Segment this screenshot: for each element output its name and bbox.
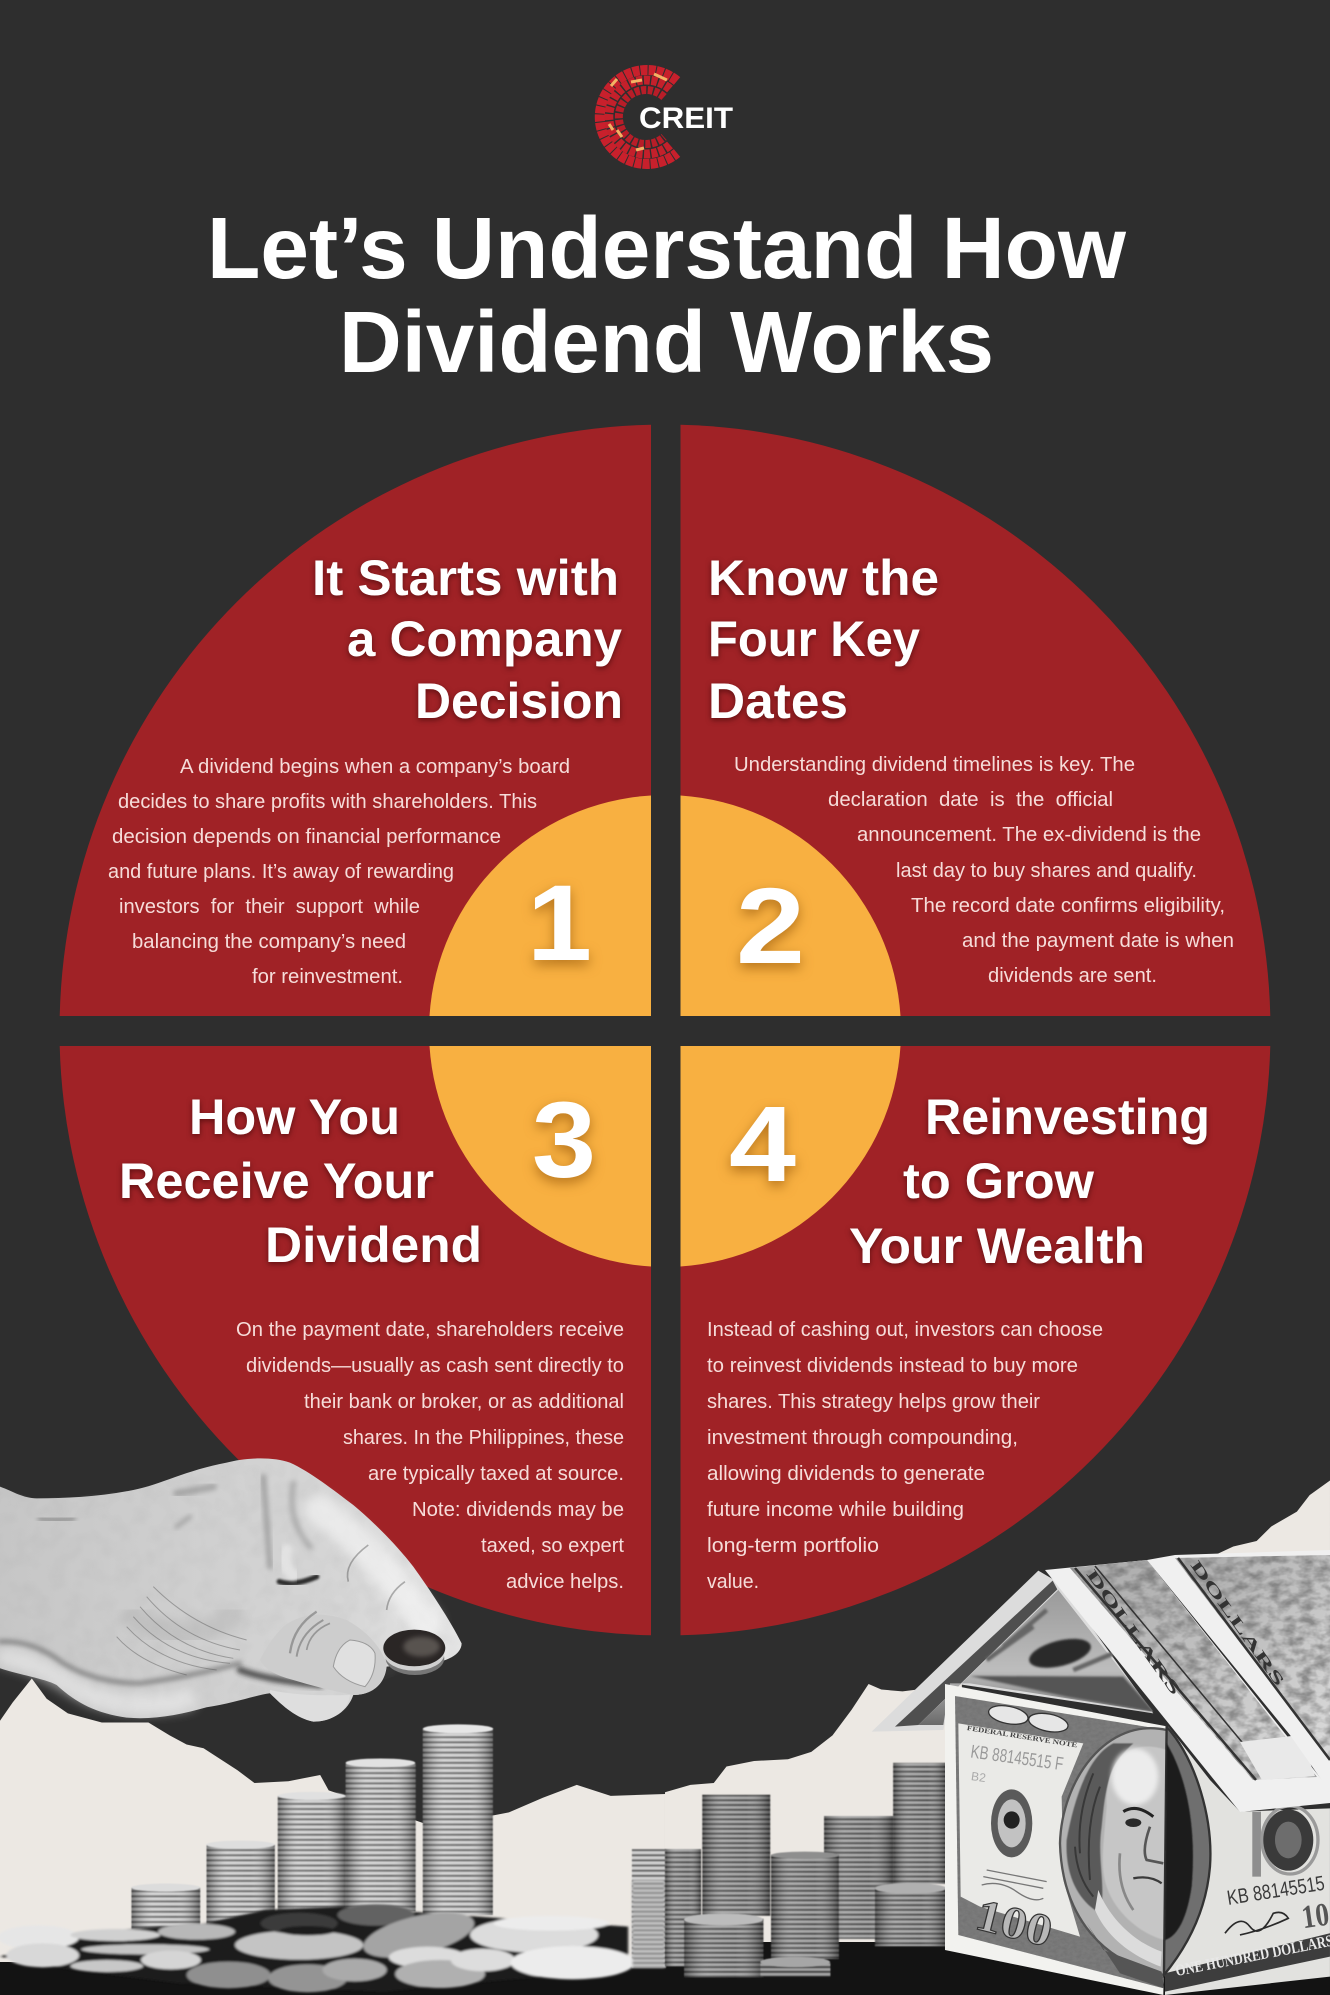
body text: Note: dividends may be bbox=[412, 1498, 624, 1521]
portrait oval bbox=[1060, 1728, 1167, 1975]
heading bbox=[708, 550, 939, 729]
roof: right bill: DOLLARS bbox=[1187, 1558, 1287, 1689]
body text: dividends—usually as cash sent directly to bbox=[246, 1354, 624, 1377]
right wall bbox=[1165, 1727, 1330, 1995]
heading bbox=[849, 1089, 1210, 1274]
body text: are typically taxed at source. bbox=[368, 1462, 624, 1485]
roof: left bill bbox=[1045, 1555, 1330, 1812]
heading: Your Wealth bbox=[849, 1218, 1145, 1274]
body text: investment through compounding, bbox=[707, 1426, 1018, 1449]
body text: value. bbox=[707, 1570, 759, 1593]
roof: left bill: DOLLARS bbox=[1083, 1567, 1183, 1698]
heading: It Starts with bbox=[312, 550, 619, 606]
body text: On the payment date, shareholders receive bbox=[236, 1318, 624, 1341]
torn paper background bbox=[0, 1481, 1330, 1992]
heading: Know the bbox=[708, 550, 939, 606]
body text: taxed, so expert bbox=[481, 1534, 624, 1557]
panel: step 3 bbox=[60, 1046, 651, 1635]
panel: step 2 bbox=[680, 425, 1270, 1016]
image: hand holding coin bbox=[0, 1457, 463, 1723]
number 2: 2 bbox=[736, 865, 805, 986]
body text: announcement. The ex-dividend is the bbox=[857, 823, 1201, 846]
heading: How You bbox=[189, 1089, 400, 1145]
image: coin stacks right bbox=[665, 1763, 946, 1977]
body text bbox=[108, 755, 570, 988]
panel: step 4 bbox=[680, 1046, 1270, 1635]
heading: Receive Your bbox=[119, 1153, 434, 1209]
body text bbox=[236, 1318, 624, 1593]
body text: shares. This strategy helps grow their bbox=[707, 1390, 1040, 1413]
body text: to reinvest dividends instead to buy more bbox=[707, 1354, 1078, 1377]
body text: shares. In the Philippines, these bbox=[343, 1426, 624, 1449]
title: Dividend Works bbox=[339, 294, 994, 391]
number circle quarter bbox=[680, 796, 900, 1016]
front wall bill: KB 88145515 F bbox=[969, 1741, 1065, 1775]
body text: declaration date is the official bbox=[828, 788, 1113, 811]
body text: allowing dividends to generate bbox=[707, 1462, 985, 1485]
top 100 ornaments bbox=[987, 1703, 1070, 1735]
body text: The record date confirms eligibility, bbox=[911, 894, 1225, 917]
front wall bill bbox=[945, 1684, 1210, 1995]
quadrant red bbox=[680, 425, 1270, 1016]
body text: Understanding dividend timelines is key. The bbox=[734, 753, 1135, 776]
black ground band bbox=[0, 1942, 1330, 1995]
heading: Dates bbox=[708, 673, 848, 729]
number circle quarter bbox=[680, 1046, 900, 1266]
roof: right bill bbox=[1147, 1550, 1330, 1792]
number circle quarter bbox=[430, 796, 651, 1016]
body text bbox=[707, 1318, 1103, 1593]
logo wordmark: CREIT bbox=[639, 102, 733, 135]
body text: future income while building bbox=[707, 1498, 964, 1521]
hand shading bbox=[0, 1477, 427, 1704]
body text: Instead of cashing out, investors can choose bbox=[707, 1318, 1103, 1341]
lower fingers bbox=[270, 1690, 350, 1722]
gable and interior bbox=[872, 1571, 1153, 1732]
hand grain texture bbox=[0, 1457, 463, 1723]
title: Let’s Understand How bbox=[207, 200, 1126, 297]
bottom 100: 100 bbox=[971, 1890, 1057, 1957]
heading: Four Key bbox=[708, 611, 920, 667]
right wall emblem bbox=[1252, 1812, 1261, 1877]
body text: decides to share profits with shareholders. This bbox=[118, 790, 537, 813]
signature bbox=[982, 1870, 1047, 1900]
image: scattered coins pile bbox=[0, 1880, 664, 1992]
heading: Reinvesting bbox=[925, 1089, 1210, 1145]
heading: Dividend bbox=[265, 1217, 482, 1273]
body text: dividends are sent. bbox=[988, 964, 1157, 987]
body text: A dividend begins when a company’s board bbox=[180, 755, 570, 778]
image: coin stacks left bbox=[131, 1724, 666, 1968]
wrinkles bbox=[117, 1545, 405, 1675]
hand silhouette bbox=[0, 1458, 462, 1722]
icon: segmented red ring bbox=[600, 70, 677, 164]
number 4: 4 bbox=[729, 1083, 796, 1204]
heading: to Grow bbox=[903, 1153, 1094, 1209]
number circle quarter bbox=[430, 1046, 651, 1266]
heading: Decision bbox=[415, 673, 623, 729]
body text: their bank or broker, or as additional bbox=[304, 1390, 624, 1413]
hair bbox=[1066, 1743, 1133, 1913]
body text: and future plans. It’s away of rewarding bbox=[108, 860, 454, 883]
shadowed half of portrait bbox=[1164, 1727, 1210, 1975]
coin in fingers bbox=[383, 1630, 445, 1675]
logo: CREIT bbox=[600, 70, 733, 164]
dark lower band bbox=[1165, 1933, 1330, 1992]
front wall bill: B2 bbox=[970, 1769, 987, 1785]
seal bbox=[991, 1789, 1032, 1857]
image: dollar-bill house bbox=[872, 1550, 1330, 1995]
number 3: 3 bbox=[532, 1079, 596, 1200]
quadrant red bbox=[60, 1046, 651, 1635]
quadrant red bbox=[680, 1046, 1270, 1635]
face bbox=[1103, 1747, 1167, 1940]
body text: and the payment date is when bbox=[962, 929, 1234, 952]
number 1: 1 bbox=[527, 862, 592, 983]
body text: last day to buy shares and qualify. bbox=[896, 859, 1197, 882]
thumb bbox=[260, 1615, 387, 1695]
title bbox=[207, 200, 1126, 391]
heading bbox=[312, 550, 623, 729]
body text bbox=[734, 753, 1234, 987]
body text: for reinvestment. bbox=[252, 965, 403, 988]
body text: balancing the company’s need bbox=[132, 930, 406, 953]
body text: decision depends on financial performance bbox=[112, 825, 501, 848]
collar and coat bbox=[1095, 1890, 1162, 1967]
quadrant red bbox=[60, 425, 651, 1016]
panel: step 1 bbox=[60, 425, 651, 1016]
body text: investors for their support while bbox=[119, 895, 420, 918]
body text: long-term portfolio bbox=[707, 1534, 879, 1557]
serial number: KB 88145515 bbox=[1225, 1872, 1326, 1909]
heading: a Company bbox=[347, 611, 622, 667]
body text: advice helps. bbox=[506, 1570, 624, 1593]
heading bbox=[119, 1089, 482, 1273]
bill text: FEDERAL RESERVE NOTE bbox=[966, 1724, 1078, 1750]
